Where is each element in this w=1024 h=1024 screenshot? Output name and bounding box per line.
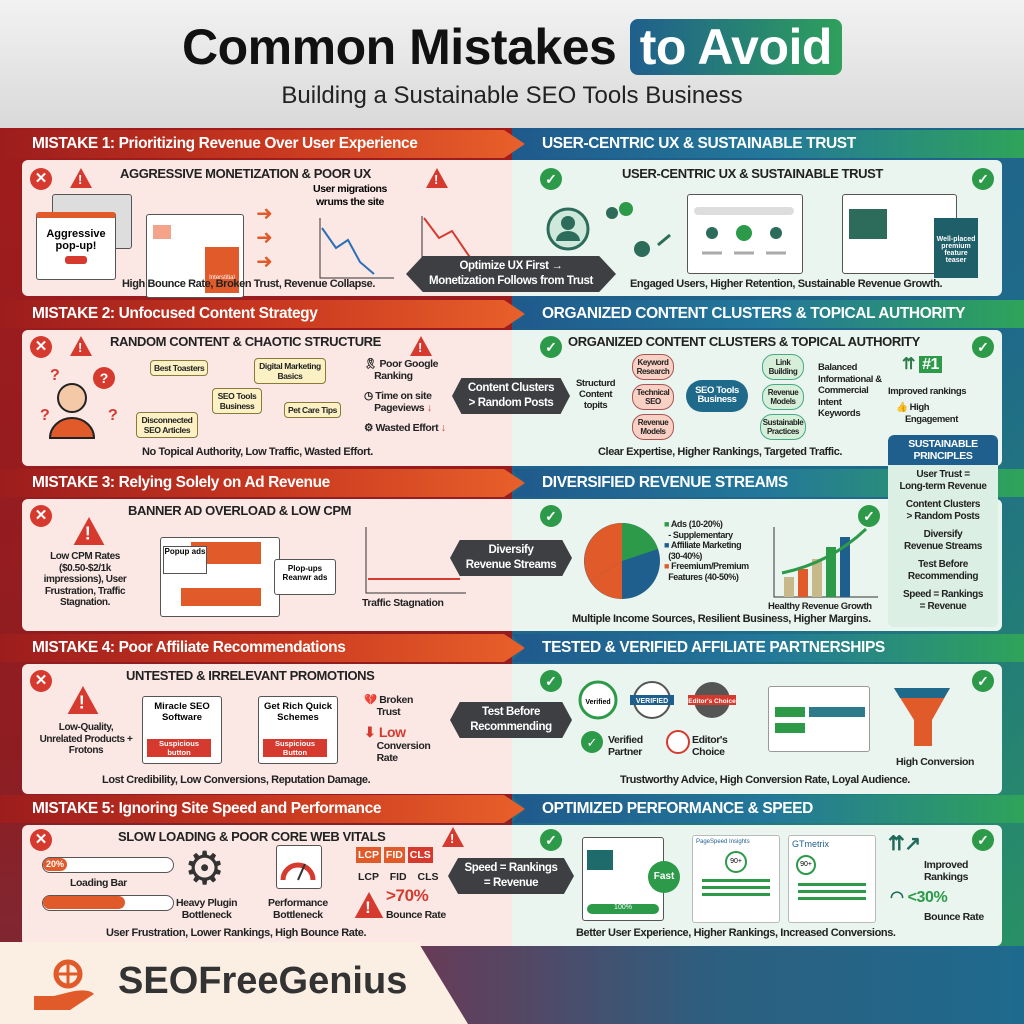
caption: Multiple Income Sources, Resilient Business, Higher Margins. bbox=[572, 613, 871, 625]
icon: miracle seo bbox=[142, 696, 222, 764]
caption: User Frustration, Lower Rankings, High Bounce Rate. bbox=[106, 927, 366, 939]
band: solution 1: USER-CENTRIC UX & SUSTAINABLE TRUST bbox=[542, 135, 856, 152]
icon: confused person: ? bbox=[50, 367, 60, 384]
icon: miracle seo: Miracle SEO Software bbox=[154, 701, 210, 723]
icon: gear: ⚙ bbox=[184, 842, 225, 894]
panel: mistake 2: Pet Care Tips bbox=[288, 405, 337, 415]
sidebar: sustainable principles: SUSTAINABLE bbox=[908, 438, 978, 450]
legend: Features (40-50%) bbox=[668, 572, 738, 582]
icon: fast browser: 100% bbox=[614, 904, 632, 911]
chart: growth bars bbox=[774, 527, 878, 598]
band: mistake 3: MISTAKE 3: Relying Solely on Ad Revenue bbox=[32, 474, 330, 491]
issues list bbox=[364, 358, 438, 382]
background right bbox=[512, 128, 1024, 1024]
panel: solution 4: ✓ bbox=[545, 673, 557, 689]
caption: No Topical Authority, Low Traffic, Wasted Effort. bbox=[142, 446, 373, 458]
pill: diversify: Diversify bbox=[488, 544, 533, 556]
panel: solution 2: Engagement bbox=[905, 414, 958, 425]
panel: solution 2: ✓ bbox=[545, 339, 557, 355]
panel: solution 3: ✓ bbox=[545, 508, 557, 524]
gtmetrix card: GTmetrix bbox=[792, 839, 829, 849]
panel: solution 1: ✓ bbox=[977, 171, 989, 187]
heading: ORGANIZED CONTENT CLUSTERS & TOPICAL AUTHORITY bbox=[568, 334, 920, 349]
sidebar: sustainable principles: Revenue Streams Test Before bbox=[904, 540, 982, 570]
icon: globe hand bbox=[34, 960, 94, 1010]
cluster diagram: Sustainable Practices bbox=[763, 418, 803, 436]
panel: mistake 5 bbox=[22, 825, 514, 946]
panel: mistake 1: ✕ bbox=[35, 170, 47, 187]
cluster diagram: Keyword Research bbox=[637, 358, 669, 376]
icon: gauge bbox=[276, 845, 322, 889]
legend bbox=[664, 519, 749, 582]
heading: UNTESTED & IRRELEVANT PROMOTIONS bbox=[126, 668, 374, 683]
loading bars bbox=[42, 857, 174, 873]
chart: pie bbox=[584, 523, 660, 599]
arrows: ➜ bbox=[256, 227, 273, 249]
band: solution 2: ORGANIZED CONTENT CLUSTERS & TOPICAL AUTHORITY bbox=[542, 305, 965, 322]
panel: solution 4 bbox=[512, 664, 1002, 794]
pill: speed bbox=[448, 858, 574, 894]
panel: solution 2: Intent bbox=[818, 396, 841, 408]
panel: solution 2: Structurd bbox=[576, 378, 615, 389]
band: mistake 2 bbox=[0, 300, 525, 328]
panel: solution 5: ✓ bbox=[977, 832, 989, 848]
band: solution 2 bbox=[512, 300, 1024, 328]
heading: SLOW LOADING & POOR CORE WEB VITALS bbox=[118, 829, 385, 844]
pagespeed card: PageSpeed Insights bbox=[696, 839, 750, 845]
caption: High Bounce Rate, Broken Trust, Revenue Collapse. bbox=[122, 278, 375, 290]
tags: Best Toasters bbox=[154, 363, 204, 373]
footer logo panel bbox=[0, 942, 468, 1024]
legend: ■ Affiliate Marketing bbox=[664, 540, 741, 550]
panel: mistake 4 bbox=[22, 664, 514, 794]
icon: users bbox=[546, 202, 671, 257]
gtmetrix card: 90+ bbox=[800, 861, 812, 868]
panel: mistake 5: Loading Bar bbox=[70, 877, 127, 889]
pill: UX first bbox=[406, 256, 616, 292]
panel: solution 4: Verified bbox=[608, 734, 643, 746]
text: broken trust: Trust bbox=[377, 706, 400, 718]
icon: popup bbox=[36, 194, 244, 298]
panel: solution 2 bbox=[512, 330, 1002, 466]
legend: - Supplementary bbox=[668, 530, 733, 540]
tags bbox=[150, 360, 208, 376]
band: mistake 1 bbox=[0, 130, 525, 158]
CWV tags: LCP FID CLS bbox=[358, 849, 431, 861]
icon: funnel bbox=[894, 688, 950, 746]
cluster diagram: Revenue Models bbox=[768, 388, 798, 406]
arrows: ➜ bbox=[256, 203, 273, 225]
panel: mistake 1: Interstitial bbox=[209, 275, 235, 281]
band: mistake 4 bbox=[0, 634, 525, 662]
icon: confused person: ? bbox=[108, 407, 118, 424]
caption: Better User Experience, Higher Rankings, Increased Conversions. bbox=[576, 927, 896, 939]
panel: solution 3: ✓ bbox=[863, 508, 875, 524]
panel: solution 3: Healthy Revenue Growth bbox=[768, 601, 872, 612]
arrows: ➜ bbox=[256, 251, 273, 273]
pill: clusters bbox=[452, 378, 570, 414]
caption: Lost Credibility, Low Conversions, Reputation Damage. bbox=[102, 774, 370, 786]
sidebar: sustainable principles bbox=[888, 435, 998, 627]
sidebar: sustainable principles: > Random Posts Diversify bbox=[906, 510, 980, 540]
sidebar: sustainable principles: Recommending Speed = Rankings bbox=[903, 570, 983, 600]
panel: mistake 3 bbox=[22, 499, 514, 631]
panel: mistake 5: Bounce Rate bbox=[386, 909, 446, 921]
band: solution 3 bbox=[512, 469, 1024, 497]
text: broken trust bbox=[364, 694, 413, 718]
panel: solution 4: Choice bbox=[692, 746, 725, 758]
title: Common Mistakes to Avoid bbox=[182, 19, 832, 75]
icon: miracle seo: Suspicious button bbox=[159, 739, 199, 757]
icon: comparison table bbox=[768, 686, 870, 752]
icon: confused person bbox=[40, 367, 118, 439]
panel: mistake 2: Digital Marketing Basics bbox=[259, 361, 321, 381]
pill: clusters: Content Clusters bbox=[468, 382, 554, 394]
panel: mistake 3: Plop-ups Reanwr ads bbox=[283, 564, 327, 582]
band: mistake 1: MISTAKE 1: Prioritizing Revenue Over User Experience bbox=[32, 135, 418, 152]
panel: mistake 4: ✕ bbox=[35, 672, 47, 689]
panel: solution 5: Rankings bbox=[924, 871, 968, 883]
pill: test bbox=[450, 702, 572, 738]
band: solution 3: DIVERSIFIED REVENUE STREAMS bbox=[542, 474, 788, 491]
band: mistake 2: MISTAKE 2: Unfocused Content Strategy bbox=[32, 305, 317, 322]
icon: browser feature bbox=[842, 194, 957, 274]
icon: get rich: Suspicious Button bbox=[275, 739, 315, 757]
header bbox=[0, 0, 1024, 128]
pill: test: Test Before bbox=[482, 706, 540, 718]
panel: mistake 4: Low-Quality, Unrelated Products + Frotons bbox=[40, 722, 132, 756]
panel: mistake 2: SEO Tools Business bbox=[218, 391, 256, 411]
panel: solution 2: Keywords bbox=[818, 408, 860, 419]
legend: ■ Ads (10-20%) bbox=[664, 519, 723, 529]
legend: (30-40%) bbox=[668, 550, 702, 560]
panel: solution 5: Fast bbox=[654, 871, 674, 882]
sidebar: sustainable principles: PRINCIPLES bbox=[913, 450, 972, 462]
sidebar: sustainable principles: Long-term Revenue Content Clusters bbox=[899, 480, 987, 510]
panel: solution 4: High Conversion bbox=[896, 756, 974, 768]
panel: mistake 5: ✕ bbox=[35, 831, 47, 848]
panel: mistake 4: Conversion bbox=[377, 740, 430, 752]
panel: solution 5: Bounce Rate bbox=[924, 911, 984, 923]
icon: get rich: Get Rich Quick Schemes bbox=[264, 701, 332, 723]
panel: solution 2: ✓ bbox=[977, 339, 989, 355]
badges: Editor's Choice bbox=[688, 698, 736, 705]
issues list: Ranking bbox=[374, 370, 413, 382]
panel: solution 4: Editor's bbox=[692, 734, 727, 746]
cluster diagram: Technical SEO bbox=[637, 388, 669, 406]
panel: mistake 5: Performance bbox=[268, 897, 328, 909]
brand name: SEOFreeGenius bbox=[118, 960, 407, 1002]
icon: popup: Aggressive pop-up! bbox=[46, 228, 106, 252]
heading: RANDOM CONTENT & CHAOTIC STRUCTURE bbox=[110, 334, 381, 349]
caption: Clear Expertise, Higher Rankings, Targeted Traffic. bbox=[598, 446, 842, 458]
panel: solution 4: Partner bbox=[608, 746, 642, 758]
cluster diagram: SEO Tools Business bbox=[695, 385, 739, 405]
text: low cpm: Low CPM Rates ($0.50-$2/1k impressions), User Frustration, Traffic Stagnation. bbox=[44, 551, 126, 608]
heading: AGGRESSIVE MONETIZATION & POOR UX bbox=[120, 166, 371, 181]
icon: ad overload browsers: Popup ads bbox=[165, 547, 205, 556]
cluster diagram bbox=[632, 354, 806, 440]
panel: mistake 2: ✕ bbox=[35, 338, 47, 355]
pill: diversify bbox=[450, 540, 572, 576]
panel: solution 3 bbox=[512, 499, 1002, 631]
panel: mistake 5: >70% bbox=[386, 886, 428, 905]
band: solution 1 bbox=[512, 130, 1024, 158]
panel: solution 2: Balanced bbox=[818, 362, 857, 373]
panel: solution 2: Improved rankings bbox=[888, 386, 966, 397]
icon: confused person: ? bbox=[100, 370, 108, 386]
pill: diversify: Revenue Streams bbox=[466, 559, 556, 571]
band: mistake 4: MISTAKE 4: Poor Affiliate Recommendations bbox=[32, 639, 345, 656]
legend: ■ Freemium/Premium bbox=[664, 561, 749, 571]
panel: mistake 5: Bottleneck bbox=[182, 909, 231, 921]
chart: declining: wrums the site bbox=[315, 196, 385, 208]
panel: mistake 5: Heavy Plugin bbox=[176, 897, 237, 909]
badges: Verified bbox=[585, 699, 611, 706]
icon: get rich bbox=[258, 696, 338, 764]
icon: browser users bbox=[687, 194, 803, 274]
panel: solution 5: Improved bbox=[924, 859, 968, 871]
badges: VERIFIED bbox=[636, 698, 668, 705]
background left bbox=[0, 128, 512, 1024]
pill: speed: = Revenue bbox=[484, 877, 538, 889]
arrows bbox=[256, 203, 273, 273]
band: solution 4: TESTED & VERIFIED AFFILIATE PARTNERSHIPS bbox=[542, 639, 885, 656]
improved rankings: ⇈↗ bbox=[888, 833, 921, 855]
panel: solution 2: Content bbox=[579, 389, 612, 400]
panel: solution 1: Well-placed premium feature teaser bbox=[937, 236, 975, 264]
band: mistake 5: MISTAKE 5: Ignoring Site Speed and Performance bbox=[32, 800, 381, 817]
panel: solution 2: topits bbox=[584, 400, 607, 411]
pagespeed card bbox=[692, 835, 780, 923]
badges: ✓ bbox=[587, 735, 597, 750]
panel: solution 5 bbox=[512, 825, 1002, 946]
band: mistake 5 bbox=[0, 795, 525, 823]
panel: mistake 2: ⚙ Wasted Effort ↓ bbox=[364, 422, 446, 434]
pill: test: Recommending bbox=[470, 721, 552, 733]
heading: BANNER AD OVERLOAD & LOW CPM bbox=[128, 503, 351, 518]
pill: UX first: Optimize UX First → bbox=[460, 260, 562, 272]
sidebar: sustainable principles: User Trust = bbox=[916, 469, 970, 480]
cluster diagram: Link Building bbox=[769, 358, 797, 376]
panel: mistake 4: ⬇ Low bbox=[364, 724, 406, 740]
loading bars: 20% bbox=[46, 859, 64, 869]
panel: mistake 3: ✕ bbox=[35, 507, 47, 524]
band: mistake 3 bbox=[0, 469, 525, 497]
badges bbox=[578, 680, 736, 754]
pill: speed: Speed = Rankings bbox=[464, 862, 557, 874]
panel: solution 1 bbox=[512, 160, 1002, 296]
chart: declining: User migrations bbox=[313, 183, 388, 195]
icon: ad overload browsers bbox=[160, 537, 280, 617]
panel: mistake 5: LCP FID CLS bbox=[358, 871, 439, 883]
caption: Engaged Users, Higher Retention, Sustainable Revenue Growth. bbox=[630, 278, 942, 290]
text: broken trust: 💔 Broken bbox=[364, 694, 413, 706]
pagespeed card: 90+ bbox=[730, 858, 742, 865]
icon: confused person: ? bbox=[40, 407, 50, 424]
footer background bbox=[0, 946, 1024, 1024]
panel: solution 4: ✓ bbox=[977, 673, 989, 689]
panel: mistake 5: Bottleneck bbox=[273, 909, 323, 921]
band: solution 4 bbox=[512, 634, 1024, 662]
band: solution 5: OPTIMIZED PERFORMANCE & SPEED bbox=[542, 800, 813, 817]
sidebar: sustainable principles: = Revenue bbox=[920, 600, 966, 612]
icon: fast browser bbox=[582, 837, 664, 921]
panel: solution 5: ✓ bbox=[545, 832, 557, 848]
subtitle: Building a Sustainable SEO Tools Business bbox=[281, 82, 743, 109]
panel: mistake 2: Pageviews ↓ bbox=[374, 402, 432, 414]
issues list: 🎗 Poor Google bbox=[364, 358, 438, 370]
pill: UX first: Monetization Follows from Trust bbox=[429, 275, 593, 287]
heading: USER-CENTRIC UX & SUSTAINABLE TRUST bbox=[622, 166, 883, 181]
pill: clusters: > Random Posts bbox=[469, 397, 553, 409]
cluster diagram: Revenue Models bbox=[638, 418, 668, 436]
panel: solution 1: ✓ bbox=[545, 171, 557, 187]
gtmetrix card bbox=[788, 835, 876, 923]
icon: rankings: ⇈ #1 bbox=[902, 356, 939, 373]
band: solution 5 bbox=[512, 795, 1024, 823]
panel: solution 2: 👍 High bbox=[896, 402, 929, 413]
panel: mistake 1 bbox=[22, 160, 514, 296]
panel: solution 2: Informational & bbox=[818, 374, 882, 384]
panel: mistake 2: ◷ Time on site bbox=[364, 390, 432, 402]
panel: mistake 4: Rate bbox=[377, 752, 398, 764]
panel: mistake 2 bbox=[22, 330, 514, 466]
caption: Trustworthy Advice, High Conversion Rate, Loyal Audience. bbox=[620, 774, 910, 786]
panel: mistake 2: Disconnected SEO Articles bbox=[142, 415, 192, 435]
chart: declining bbox=[313, 183, 470, 278]
chart: stagnation bbox=[366, 527, 466, 594]
panel: solution 2: Commercial bbox=[818, 385, 868, 396]
panel: mistake 3: Traffic Stagnation bbox=[362, 597, 443, 609]
panel: solution 5: ◠ <30% bbox=[890, 889, 947, 906]
